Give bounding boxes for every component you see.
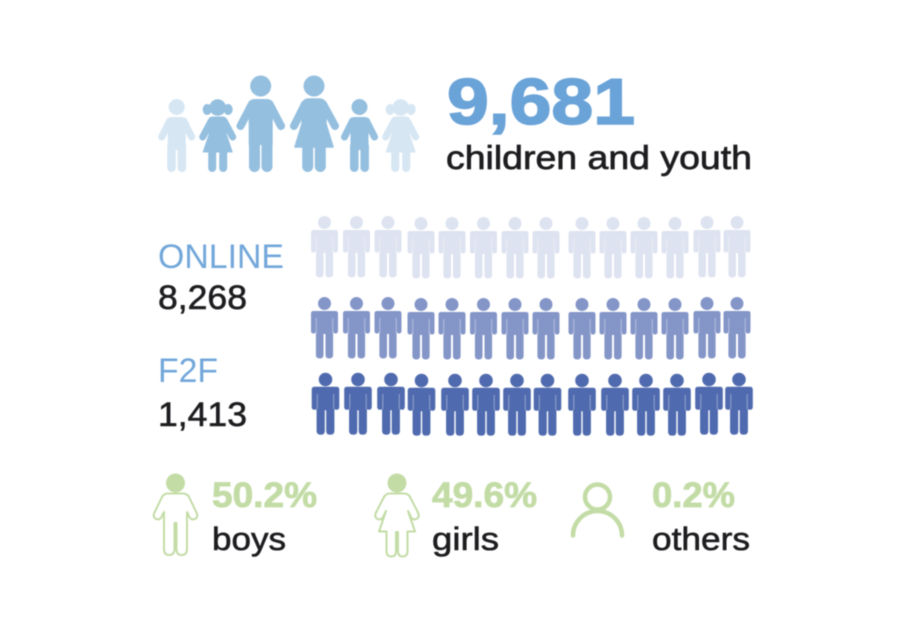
icon: others outline [573,484,622,536]
icon: girl outline [375,474,419,556]
icon: man [240,76,281,166]
label: others: others [652,521,750,557]
icon: family of six [162,76,416,168]
total number: 9,681 [447,65,635,138]
label: f2f: F2F [158,352,218,390]
value: girls percent: 49.6% [432,476,537,515]
value: others percent: 0.2% [652,476,735,515]
pictogram row: light [311,216,750,278]
icon: light boy [162,99,192,168]
label: online: ONLINE [158,238,284,276]
pictogram row: medium [311,297,750,360]
value: boys percent: 50.2% [212,476,317,515]
value: online: 8,268 [158,279,247,317]
icon: boy [344,99,374,168]
icon: woman [294,76,335,166]
icon: girl [203,99,233,168]
value: f2f: 1,413 [158,396,247,434]
pictogram row: dark [312,373,752,436]
subtitle: children and youth [446,139,752,176]
icon: light girl [386,99,416,168]
label: boys: boys [212,521,286,557]
label: girls: girls [432,521,499,557]
icon: boy outline [154,474,197,555]
